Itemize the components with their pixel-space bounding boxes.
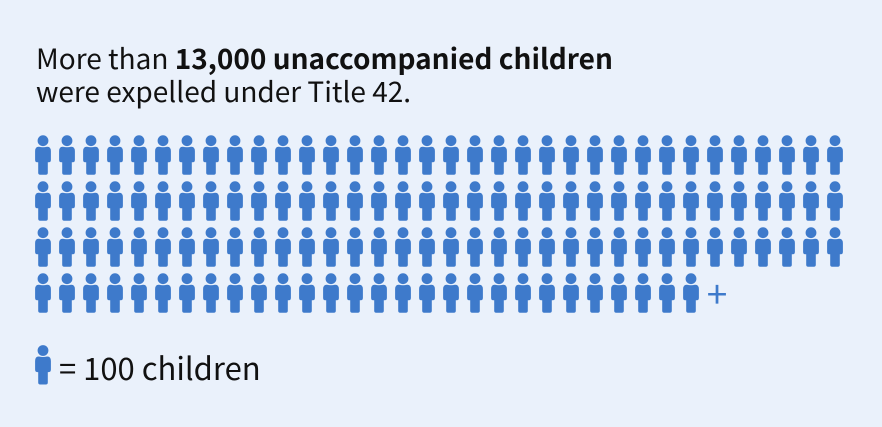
legend (35, 344, 261, 389)
plus sign: more than shown: + (707, 265, 727, 319)
pictogram chart: 130 person icons (35, 135, 843, 313)
title: More than 13,000 unaccompanied children (36, 38, 613, 78)
title: were expelled under Title 42. (36, 71, 411, 111)
title (36, 38, 613, 111)
icon: person (35, 345, 51, 384)
legend label: = 100 children (59, 344, 261, 389)
